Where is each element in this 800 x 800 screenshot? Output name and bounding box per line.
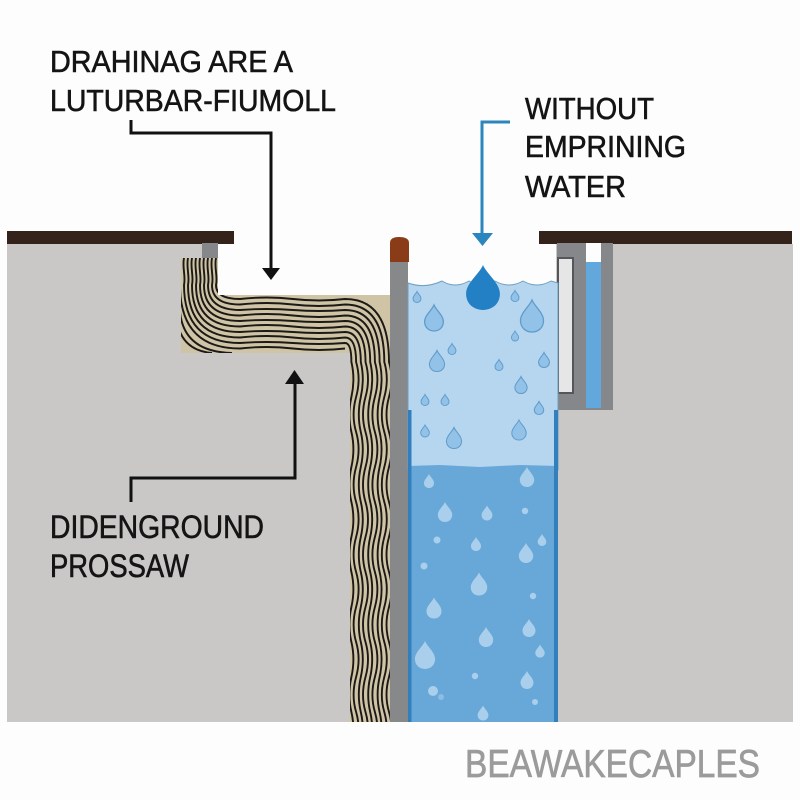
central grey pipe wall	[390, 260, 408, 722]
arrow: up to fibrous layer	[131, 370, 304, 502]
ground: right soil	[556, 244, 793, 722]
arrow: blue down to water	[472, 122, 510, 246]
light zone droplets	[413, 290, 549, 448]
deep zone droplets	[415, 467, 546, 720]
heading: top left label: DRAHINAG ARE A	[50, 44, 293, 79]
white inner panel	[558, 258, 573, 393]
deep water column	[408, 410, 558, 722]
fibrous drainage layer	[180, 258, 392, 747]
heading: top right label: WATER	[525, 169, 626, 204]
small grey post	[202, 243, 218, 259]
light water column	[408, 281, 558, 470]
label: lower left	[50, 509, 264, 584]
label: lower left: PROSSAW	[50, 548, 190, 584]
rust pipe cap	[390, 237, 409, 262]
ground: left soil	[7, 244, 390, 722]
left surface cap	[7, 231, 234, 244]
large falling water drop	[466, 265, 500, 310]
heading: top right label: WITHOUT	[525, 91, 654, 126]
right grey structure	[557, 243, 613, 410]
white trench notch	[218, 243, 390, 295]
heading: top right label: EMPRINING	[525, 129, 686, 164]
arrow: down into trench	[131, 120, 280, 280]
watermark brand: BEAWAKECAPLES	[465, 743, 760, 786]
heading: top right label	[525, 91, 686, 204]
narrow blue tube	[586, 243, 601, 408]
heading: top left label: LUTURBAR-FIUMOLL	[50, 83, 336, 118]
label: lower left: DIDENGROUND	[50, 509, 264, 545]
heading: top left label	[50, 44, 336, 118]
right surface cap	[539, 231, 792, 244]
